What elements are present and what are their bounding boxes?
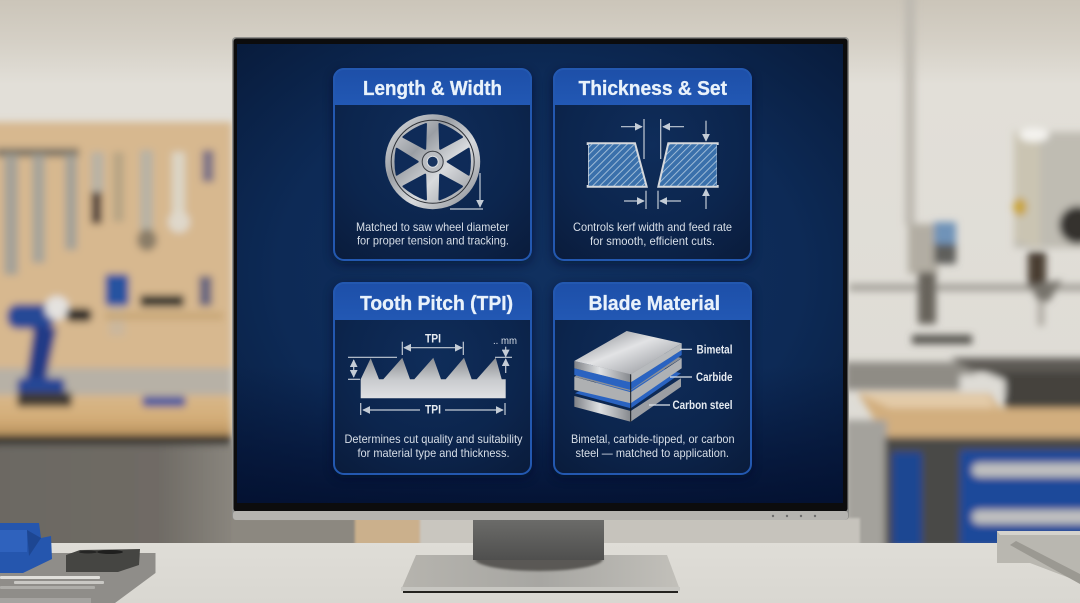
leader lines (649, 349, 692, 405)
monitor stand (401, 520, 680, 593)
right workshop: machines and bench (845, 0, 1080, 550)
diagram: blade cross-section (585, 143, 720, 187)
labels: .. mm (493, 336, 517, 347)
arrows: dimension markers (621, 119, 706, 209)
shadow (475, 547, 603, 571)
labels: Carbide (696, 372, 732, 384)
dark block (66, 549, 140, 572)
labels: TPI (425, 334, 441, 346)
icon: saw wheel (385, 114, 480, 209)
description (571, 432, 734, 460)
description: Controls kerf width and feed rate (573, 220, 732, 234)
description: Determines cut quality and suitability (344, 432, 522, 446)
icon: layered material stack (574, 331, 682, 422)
diagram: saw teeth (361, 358, 506, 398)
description: for proper tension and tracking. (357, 234, 509, 248)
tan box behind stand (232, 518, 860, 546)
panel: blade material (553, 282, 752, 478)
base (401, 555, 680, 590)
arrows: pitch markers (348, 342, 512, 415)
labels: TPI (425, 404, 441, 416)
arrow: diameter (450, 173, 483, 209)
description (344, 432, 522, 460)
LED buttons (772, 515, 816, 517)
description (356, 220, 509, 248)
desk items left (0, 523, 156, 603)
panel: length and width (333, 68, 532, 264)
labels: Carbon steel (672, 400, 732, 412)
description (573, 220, 732, 248)
blue tray (0, 523, 52, 573)
heading: Tooth Pitch (TPI) (360, 292, 513, 315)
heading: Thickness & Set (578, 77, 727, 100)
rods (0, 576, 104, 589)
panel: thickness and set (553, 68, 752, 264)
heading: Length & Width (363, 77, 502, 100)
description: Bimetal, carbide-tipped, or carbon (571, 432, 734, 446)
neck (473, 520, 604, 560)
labels (672, 344, 732, 412)
description: for material type and thickness. (358, 446, 510, 460)
desk surface (0, 543, 1080, 603)
description: Matched to saw wheel diameter (356, 220, 509, 234)
monitor (232, 37, 849, 520)
desk item right: metal tray (997, 531, 1080, 584)
left workshop: pegboard and bench (0, 122, 240, 555)
panel: tooth pitch (333, 282, 532, 478)
bezel (232, 37, 849, 520)
drill (7, 304, 55, 329)
labels (425, 334, 517, 416)
grey plate (0, 553, 156, 603)
screen (237, 44, 843, 503)
description: steel — matched to application. (576, 446, 729, 460)
heading: Blade Material (588, 292, 720, 315)
description: for smooth, efficient cuts. (590, 234, 715, 248)
labels: Bimetal (696, 344, 732, 356)
